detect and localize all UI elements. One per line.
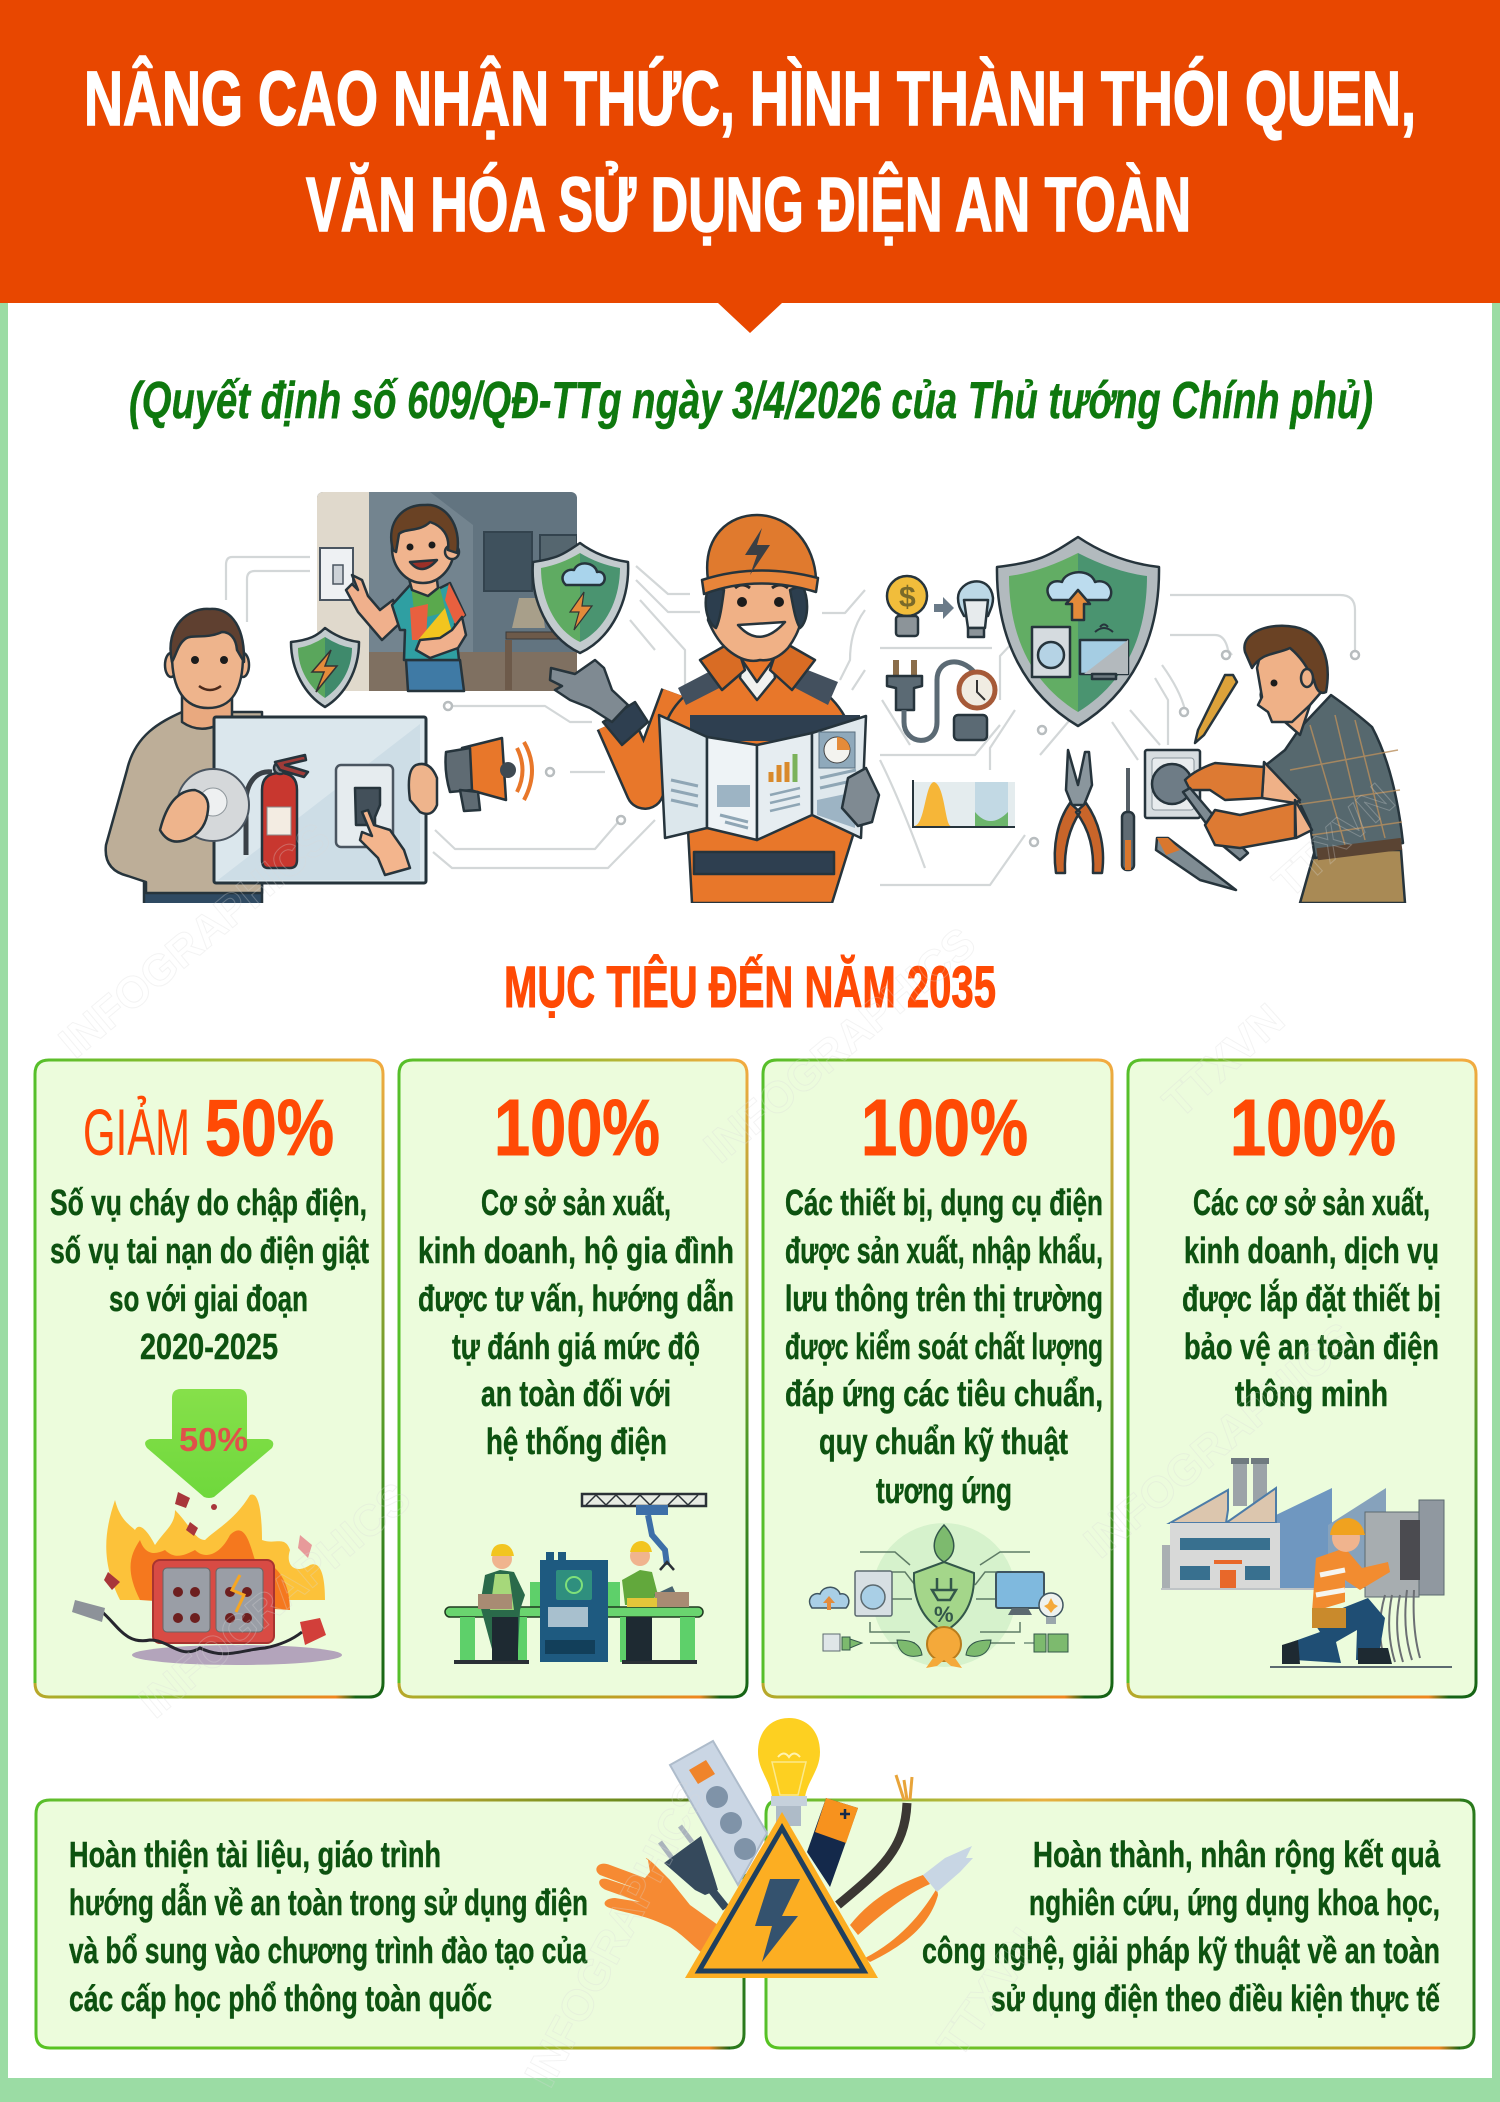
- figure: GIẢM: [83, 1095, 190, 1169]
- illustration: small shield with bolt: [291, 628, 359, 707]
- section heading: MỤC TIÊU ĐẾN NĂM 2035: [504, 955, 996, 1020]
- icon: burning outlet: [72, 1492, 342, 1665]
- icon: pliers: [1055, 750, 1103, 873]
- watermarks: INFOGRAPHICS: [50, 813, 340, 1068]
- description: Cơ sở sản xuất,: [481, 1182, 671, 1223]
- watermarks: INFOGRAPHICS: [130, 1473, 420, 1728]
- kneeling electrician: [1270, 1518, 1452, 1668]
- worker left: [478, 1544, 525, 1661]
- circuit lines: [226, 557, 1359, 885]
- illustration: child at wall switch: [317, 492, 577, 691]
- card: 100% devices: [763, 1060, 1112, 1697]
- description: thông minh: [1235, 1373, 1388, 1414]
- text: [922, 1834, 1441, 2019]
- description: hệ thống điện: [486, 1421, 667, 1462]
- icon: voltage tester: [1156, 675, 1237, 890]
- illustration: electrician at socket: [1183, 626, 1405, 903]
- watermarks: [50, 775, 1404, 2095]
- smoke detector: [160, 769, 249, 842]
- watermarks: INFOGRAPHICS: [695, 918, 985, 1173]
- text: các cấp học phổ thông toàn quốc: [69, 1978, 492, 2019]
- hero illustration: [106, 492, 1405, 910]
- card: giảm 50%: [35, 1060, 383, 1697]
- text: [69, 1834, 588, 2019]
- description: Số vụ cháy do chập điện,: [50, 1182, 367, 1223]
- description: số vụ tai nạn do điện giật: [50, 1230, 369, 1271]
- text: Hoàn thiện tài liệu, giáo trình: [69, 1834, 441, 1875]
- figure: 100%: [494, 1083, 660, 1172]
- power plug: [660, 1826, 726, 1908]
- icon: down arrow 50%: 50%: [179, 1421, 248, 1458]
- description: so với giai đoạn: [109, 1278, 308, 1319]
- description: an toàn đối với: [481, 1373, 671, 1414]
- description: đáp ứng các tiêu chuẩn,: [785, 1373, 1103, 1414]
- fire extinguisher: [246, 755, 308, 868]
- description: lưu thông trên thị trường: [785, 1278, 1103, 1319]
- chart panel: [913, 780, 1015, 827]
- battery: [807, 1798, 858, 1887]
- figure: [83, 1083, 334, 1172]
- power strip: [670, 1741, 767, 1885]
- icon: cost saving bulb: [887, 576, 993, 637]
- raised glove: [550, 660, 648, 745]
- figure: 50%: [205, 1083, 334, 1172]
- watermarks: TTXVN: [1264, 775, 1404, 907]
- description: được kiểm soát chất lượng: [785, 1326, 1103, 1367]
- description: được tư vấn, hướng dẫn: [418, 1278, 734, 1319]
- icon: cost saving bulb: $: [899, 581, 916, 614]
- text: và bổ sung vào chương trình đào tạo của: [69, 1930, 588, 1971]
- description: Các thiết bị, dụng cụ điện: [785, 1182, 1103, 1223]
- watermarks: TTXVN: [1154, 995, 1294, 1127]
- icon: screwdriver: [1122, 768, 1134, 870]
- warning triangle: [685, 1812, 878, 1978]
- description: được sản xuất, nhập khẩu,: [785, 1230, 1103, 1271]
- icon: down arrow 50%: [145, 1389, 273, 1498]
- icon: factory: [1161, 1458, 1386, 1590]
- light switch with hand: [336, 765, 410, 875]
- bottom box: research: [766, 1800, 1474, 2048]
- watermarks: TTXVN: [928, 1919, 1051, 2066]
- figure: 100%: [1230, 1083, 1396, 1172]
- description: [1182, 1182, 1441, 1414]
- safety board: [214, 717, 426, 883]
- description: tương ứng: [876, 1470, 1012, 1511]
- icon: certified smart devices: [810, 1523, 1068, 1668]
- large smart shield: [997, 537, 1159, 726]
- watermarks: INFOGRAPHICS: [516, 1774, 717, 2095]
- description: 2020-2025: [140, 1326, 278, 1367]
- description: quy chuẩn kỹ thuật: [819, 1421, 1068, 1462]
- card: 100% advice: [399, 1060, 747, 1697]
- icon: plug with timer: [887, 660, 995, 740]
- light bulb: [758, 1718, 820, 1826]
- description: tự đánh giá mức độ: [452, 1326, 700, 1367]
- watermarks: INFOGRAPHICS: [1075, 1313, 1365, 1568]
- stripped wire: [838, 1775, 912, 1905]
- wall switch: [320, 548, 353, 600]
- description: [785, 1182, 1103, 1511]
- hard hat: [702, 515, 818, 594]
- illustration: man holding safety board: [106, 609, 437, 910]
- icon: electrical hazard cluster: [596, 1718, 973, 1978]
- text: hướng dẫn về an toàn trong sử dụng điện: [69, 1882, 588, 1923]
- electrical cabinet: [1365, 1500, 1444, 1662]
- icon: megaphone: [446, 738, 532, 811]
- illustration: engineer with leaflet: [550, 515, 879, 903]
- icon: certified smart devices: %: [934, 1602, 954, 1627]
- description: [50, 1182, 369, 1367]
- description: kinh doanh, hộ gia đình: [418, 1230, 734, 1271]
- figure: 100%: [861, 1083, 1028, 1172]
- bottom box: curriculum: [36, 1800, 744, 2048]
- illustration: large shield with cloud: [533, 543, 628, 653]
- icon: production line: [445, 1494, 706, 1664]
- card: 100% smart protection: [1128, 1060, 1476, 1697]
- description: [418, 1182, 734, 1462]
- pliers: [850, 1846, 973, 1962]
- title: [84, 55, 1416, 248]
- open leaflet: [659, 715, 866, 840]
- wall socket: [1145, 750, 1200, 818]
- worker right: [622, 1541, 689, 1661]
- rubber glove: [596, 1858, 718, 1960]
- child: [346, 505, 466, 691]
- header banner: [0, 0, 1500, 333]
